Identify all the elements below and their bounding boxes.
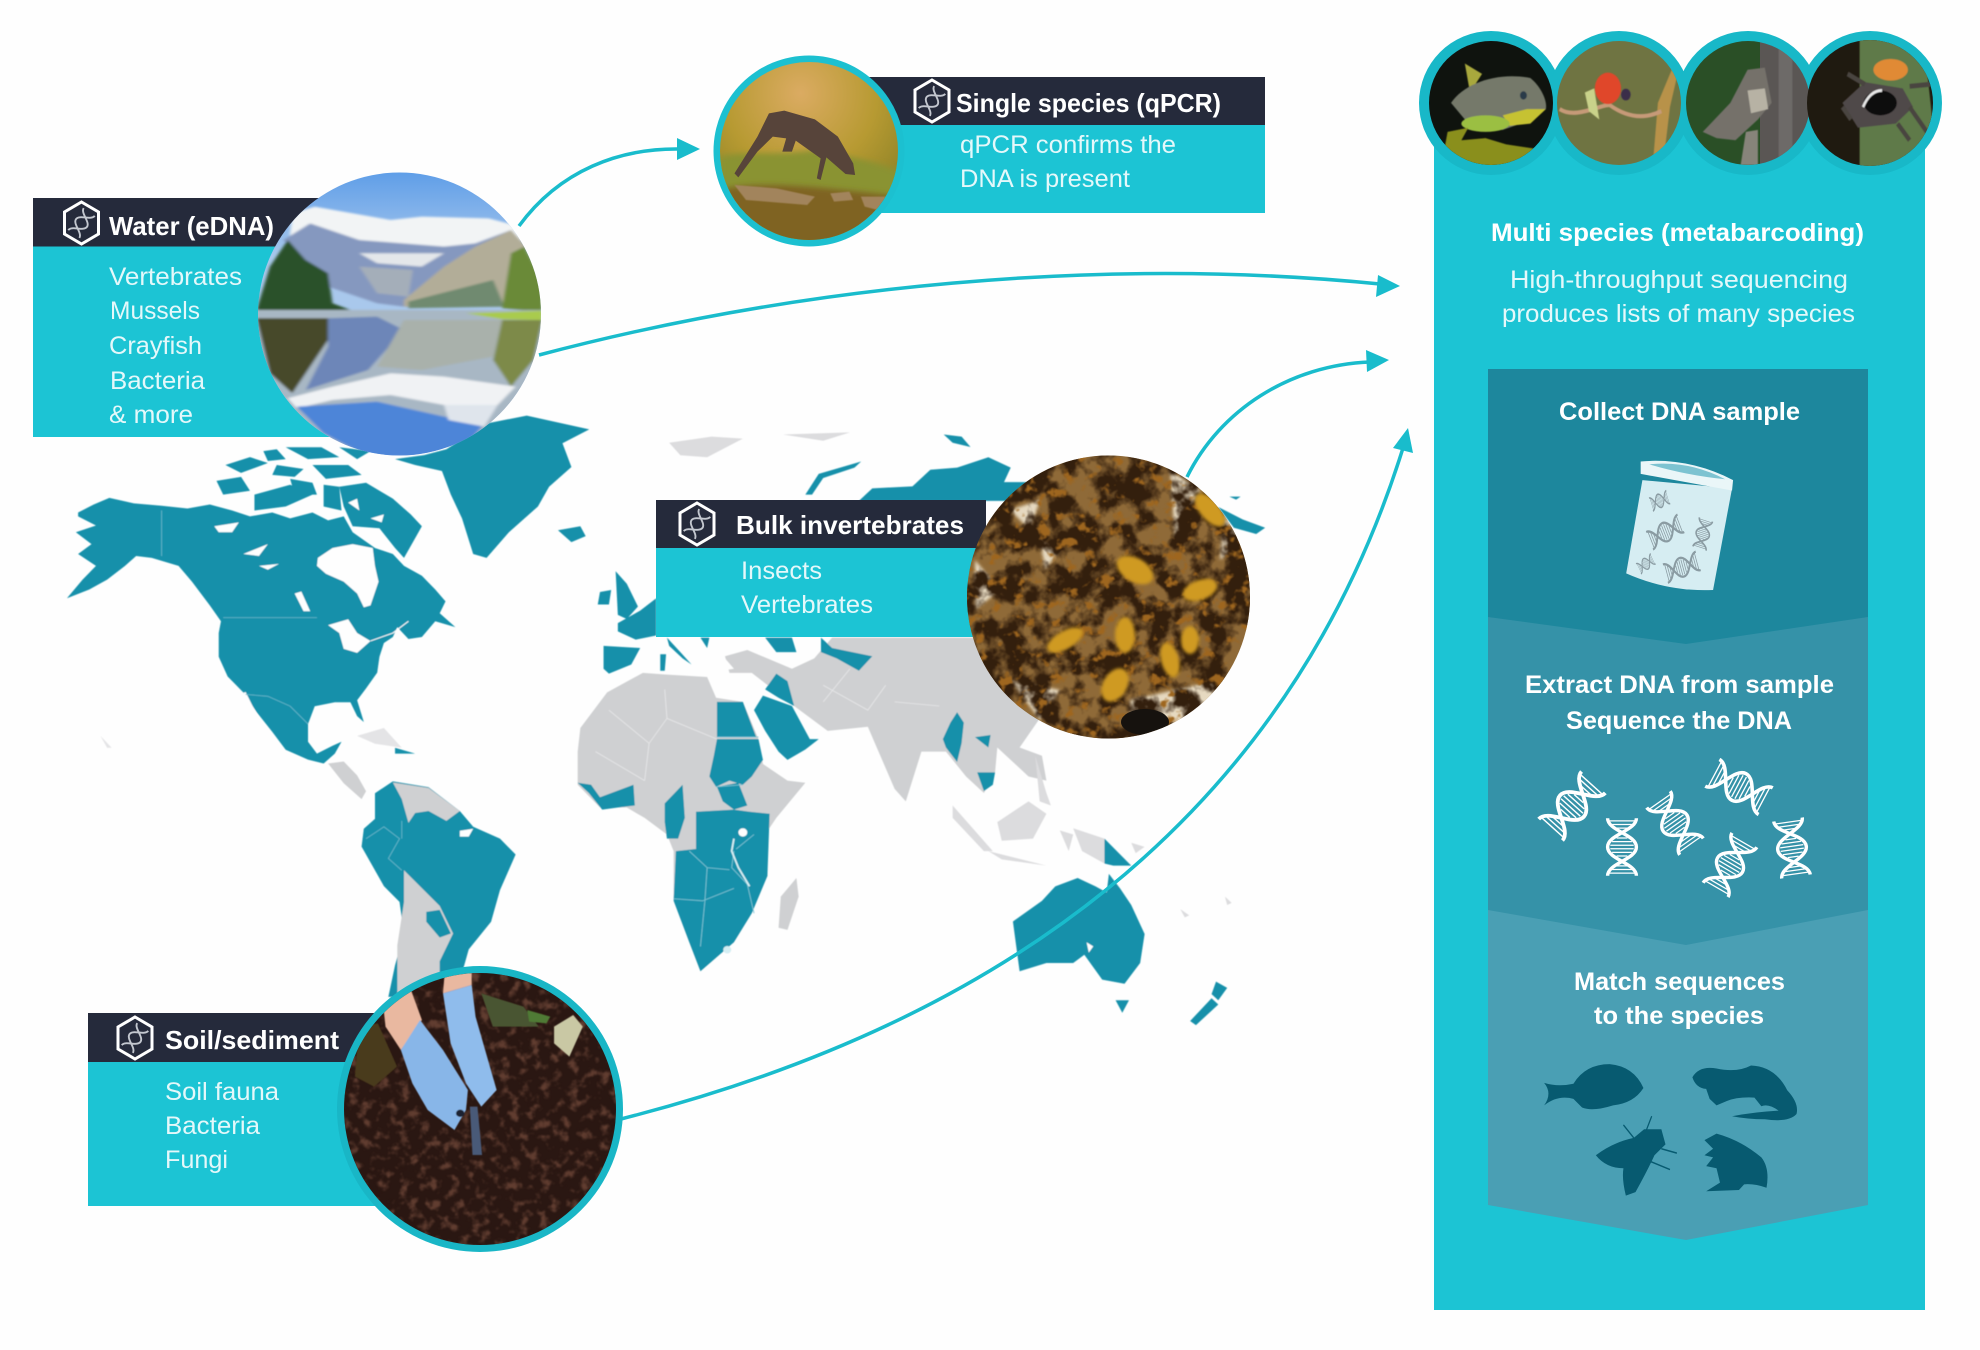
step 2 background <box>1488 600 1868 945</box>
step 2: extract and sequence DNA <box>1525 671 1834 735</box>
photo: ladybird <box>1555 38 1685 168</box>
photo: newt on moss <box>714 55 905 250</box>
icon: sample jar <box>1626 461 1733 590</box>
panel: water eDNA <box>33 172 542 457</box>
soil list: Soil fauna <box>165 1078 279 1106</box>
single species description: qPCR confirms the <box>960 131 1176 159</box>
soil header bar <box>88 1013 388 1062</box>
bulk list background <box>656 548 986 637</box>
multi species heading: Multi species (metabarcoding) <box>1491 219 1864 247</box>
silhouette: fish <box>1544 1064 1643 1109</box>
water list: Bacteria <box>110 367 205 395</box>
species photo strip <box>1419 31 1942 175</box>
multi species description: produces lists of many species <box>1502 300 1855 328</box>
water list background <box>33 246 353 437</box>
icons: species silhouettes <box>1544 1064 1797 1196</box>
single species header bar <box>820 77 1265 125</box>
arrow: soil to multi species <box>621 428 1413 1119</box>
step 2: extract and sequence DNA: Sequence the DNA <box>1566 707 1792 735</box>
photo: mountain lake <box>257 172 542 457</box>
water header bar <box>33 198 353 246</box>
arrow: bulk invertebrates to multi species <box>1187 350 1389 477</box>
step 2: extract and sequence DNA: Extract DNA from sample <box>1525 671 1834 699</box>
multi species background <box>1434 100 1925 1310</box>
photo: fish <box>1425 38 1555 169</box>
water list: Crayfish <box>109 332 202 360</box>
bulk list: Insects <box>741 557 822 585</box>
step 3 background <box>1488 880 1868 1240</box>
panel: single species qPCR <box>714 55 1265 250</box>
multi species description <box>1502 266 1855 328</box>
panel: bulk invertebrates <box>656 453 1253 741</box>
map: Europe, Africa, Asia and Oceania <box>578 432 1265 1025</box>
icon: DNA hexagon <box>915 80 949 122</box>
silhouette: frog <box>1704 1134 1768 1191</box>
icon: DNA hexagon <box>680 503 714 545</box>
multi species description: High-throughput sequencing <box>1510 266 1848 294</box>
world map <box>67 416 1265 1025</box>
step 3: match sequences to species: to the species <box>1594 1002 1764 1030</box>
silhouette: newt <box>1692 1065 1797 1120</box>
panel: soil and sediment <box>88 966 625 1253</box>
step 3: match sequences to species: Match sequences <box>1574 968 1785 996</box>
bulk list <box>741 557 873 619</box>
water list: Mussels <box>110 297 200 325</box>
single species heading: Single species (qPCR) <box>956 88 1221 118</box>
water list: & more <box>109 401 193 429</box>
single species text background <box>820 125 1265 213</box>
soil list background <box>88 1062 388 1206</box>
photo: gloved hands in soil <box>337 966 625 1253</box>
step 3: match sequences to species <box>1574 968 1785 1030</box>
water list: Vertebrates <box>109 263 242 291</box>
soil list: Fungi <box>165 1146 228 1174</box>
icon: DNA hexagon <box>118 1017 152 1059</box>
soil list <box>165 1078 279 1174</box>
icons: DNA helices <box>1539 759 1810 897</box>
soil heading: Soil/sediment <box>165 1025 339 1055</box>
silhouette: fly <box>1596 1116 1677 1196</box>
bulk header bar <box>656 500 986 548</box>
step 1: collect DNA sample: Collect DNA sample <box>1559 398 1800 426</box>
photo: insects <box>965 453 1253 741</box>
soil list: Bacteria <box>165 1112 260 1140</box>
photo: bird <box>1685 37 1810 169</box>
arrow: water to multi species <box>539 274 1400 355</box>
bulk list: Vertebrates <box>741 591 873 619</box>
water list <box>109 263 242 429</box>
photo: jumping spider <box>1805 37 1937 168</box>
step 1 background <box>1488 369 1868 644</box>
single species description <box>960 131 1176 193</box>
panel: multi species metabarcoding <box>1419 31 1942 1310</box>
single species description: DNA is present <box>960 165 1130 193</box>
icon: DNA hexagon <box>64 202 98 244</box>
arrows <box>519 138 1413 1119</box>
bulk heading: Bulk invertebrates <box>736 510 964 540</box>
arrow: water to single species <box>519 138 700 226</box>
map: Americas <box>67 416 589 999</box>
water heading: Water (eDNA) <box>109 211 274 241</box>
